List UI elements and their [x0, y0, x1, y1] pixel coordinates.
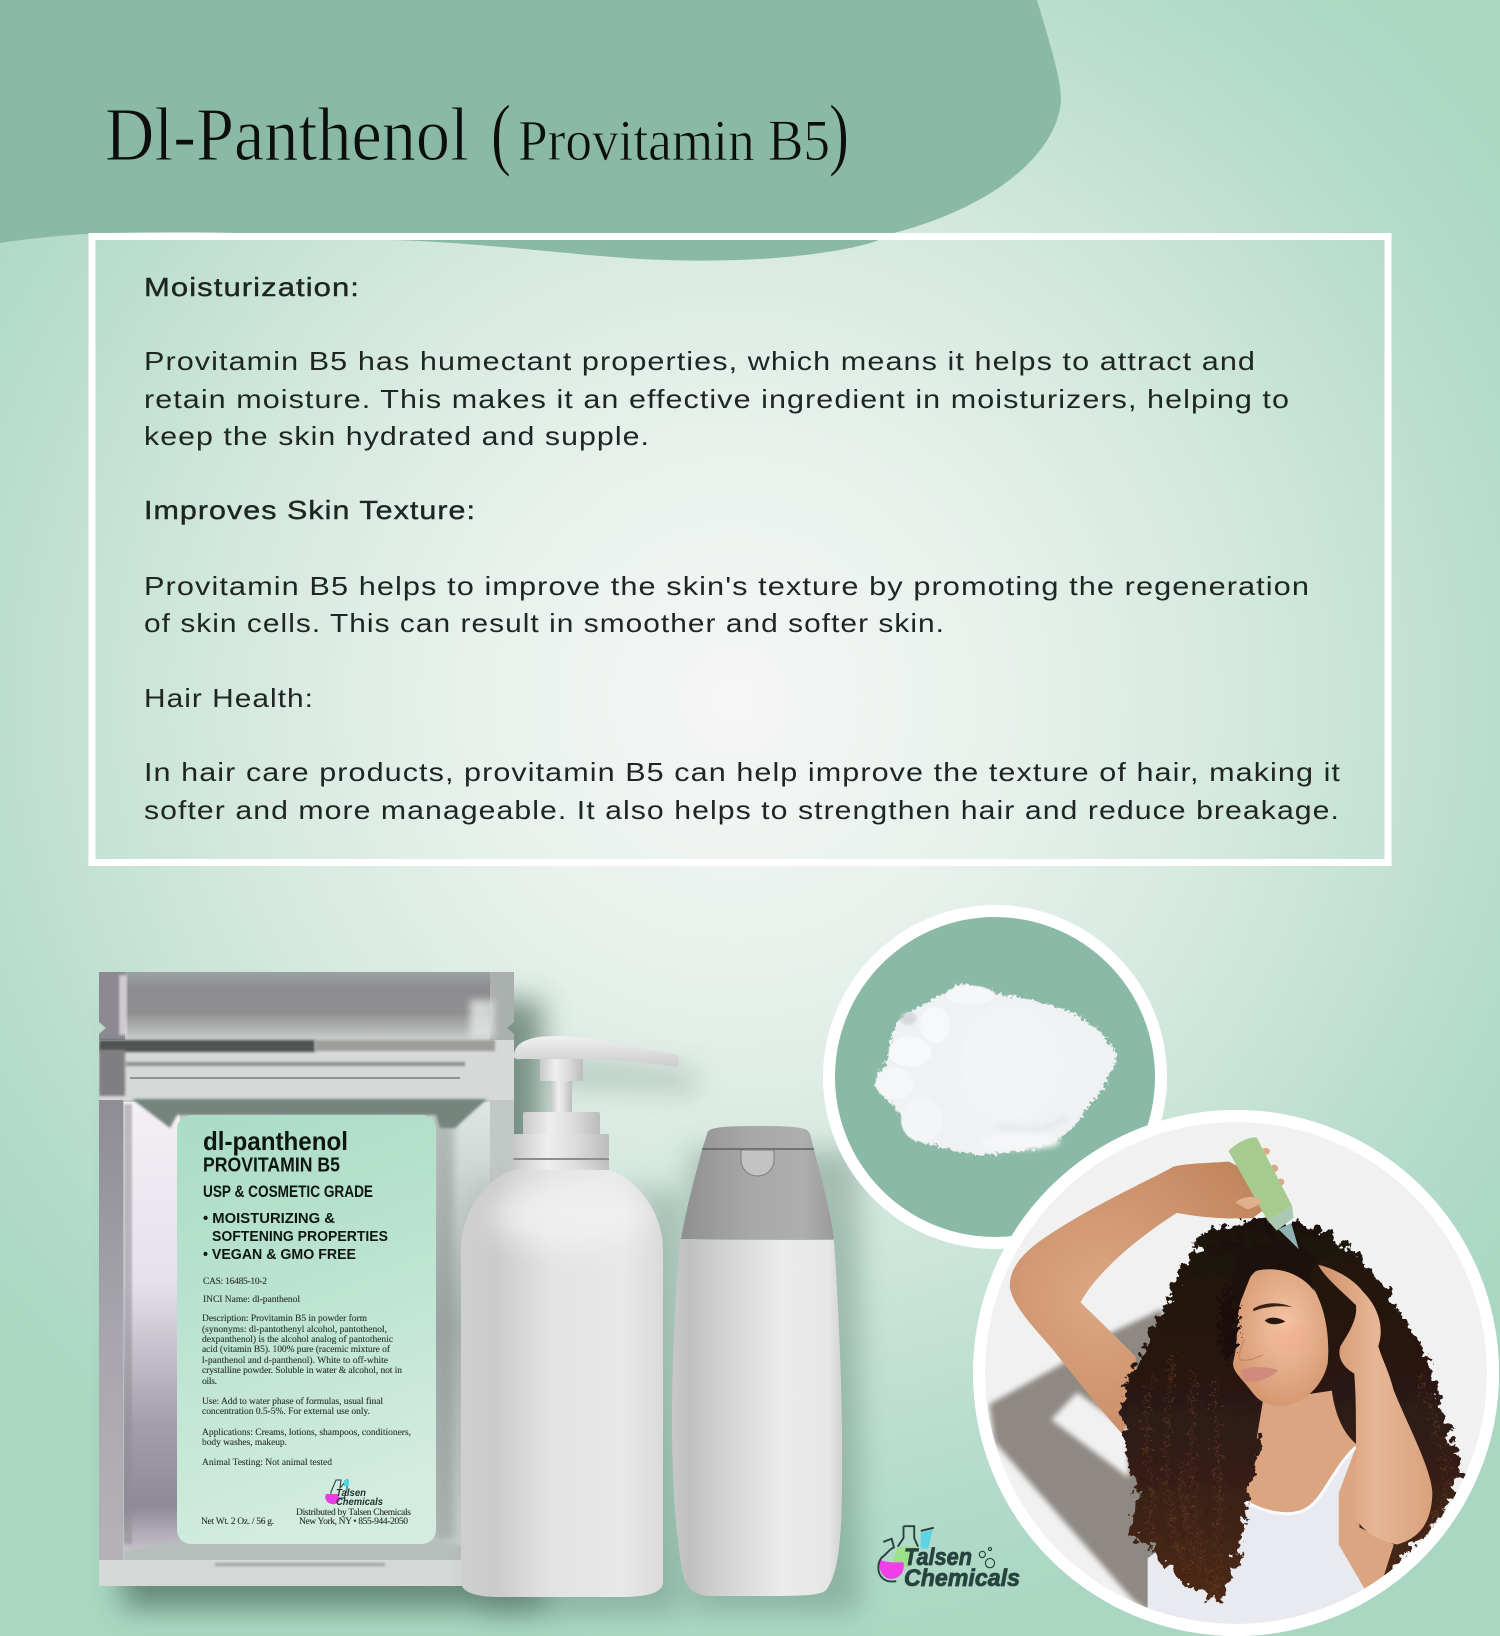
- hair front left: [1125, 1240, 1263, 1599]
- right arm and hand: [1318, 1265, 1432, 1544]
- face: [1233, 1268, 1328, 1406]
- hair over forehead: [1250, 1268, 1314, 1292]
- tank top: [1148, 1447, 1366, 1627]
- product label: Applications: Creams, lotions, shampoos, conditioners,: [202, 1428, 411, 1438]
- pouch shadow: [122, 1000, 542, 1608]
- bottle in hand: [1229, 1137, 1299, 1249]
- text: moisturization body: Provitamin B5 has humectant properties, which means it helps to attract and: [144, 346, 1256, 376]
- inner top shading: [132, 1099, 487, 1128]
- logo: Talsen Chemicals: Talsen: [904, 1544, 972, 1571]
- small logo: Talsen: [336, 1487, 366, 1499]
- product label: • MOISTURIZING &: [203, 1211, 336, 1227]
- small logo: Chemicals: [336, 1496, 383, 1508]
- text: skin texture body: Provitamin B5 helps to improve the skin's texture by promoting the regeneration: [144, 571, 1310, 601]
- text: hair health body: [144, 757, 1341, 825]
- text: moisturization body: retain moisture. This makes it an effective ingredient in moisturizers, helping to: [144, 384, 1290, 414]
- product label: acid (vitamin B5). 100% pure (racemic mixture of: [202, 1344, 391, 1355]
- product label: l-panthenol and d-panthenol). White to off-white: [202, 1355, 388, 1366]
- product label: dl-panthenol: [203, 1126, 348, 1156]
- product label: Animal Testing: Not animal tested: [202, 1458, 332, 1468]
- product label: crystalline powder. Soluble in water & alcohol, not in: [202, 1366, 402, 1376]
- panel: benefits text box: [92, 236, 1388, 862]
- product label: Net Wt. 2 Oz. / 56 g.: [201, 1517, 274, 1527]
- header blob: [0, 0, 1061, 261]
- text: hair health body: softer and more manageable. It also helps to strengthen hair and reduce breakage.: [144, 795, 1340, 825]
- logo: Talsen Chemicals: [878, 1526, 1020, 1592]
- circle: powder: [829, 911, 1161, 1243]
- raised arm: [1010, 1162, 1265, 1433]
- lips: [1241, 1367, 1278, 1382]
- foil pouch: [99, 972, 514, 1586]
- heading: hair health: Hair Health:: [144, 683, 314, 713]
- product label: concentration 0.5-5%. For external use only.: [202, 1407, 370, 1417]
- circle: woman applying hair product: [973, 1110, 1500, 1636]
- title: Provitamin B5: [518, 108, 830, 173]
- title: ): [829, 90, 849, 178]
- bottles shadow: [480, 1060, 860, 1615]
- logo: Talsen Chemicals: Chemicals: [904, 1565, 1020, 1592]
- text: hair health body: In hair care products, provitamin B5 can help improve the texture of hair, making it: [144, 757, 1341, 787]
- pump bottle body: [461, 1170, 663, 1597]
- text: skin texture body: [144, 571, 1310, 638]
- text: skin texture body: of skin cells. This can result in smoother and softer skin.: [144, 608, 945, 638]
- product label: PROVITAMIN B5: [203, 1154, 340, 1176]
- product label: dexpanthenol) is the alcohol analog of pantothenic: [202, 1334, 393, 1345]
- bottle body: [672, 1240, 842, 1596]
- pump head: [514, 1036, 679, 1067]
- product label: INCI Name: dl-panthenol: [203, 1295, 300, 1305]
- product label: SOFTENING PROPERTIES: [212, 1229, 388, 1245]
- product label: Description: Provitamin B5 in powder form: [202, 1313, 368, 1324]
- product label: [177, 1115, 436, 1544]
- text: moisturization body: keep the skin hydrated and supple.: [144, 421, 650, 451]
- curl strands: [1146, 1356, 1449, 1592]
- powder pile: [875, 984, 1117, 1155]
- heading: improves skin texture: Improves Skin Texture:: [144, 495, 476, 525]
- product label: Distributed by Talsen Chemicals: [296, 1508, 411, 1518]
- inner left panel: [124, 1102, 180, 1552]
- bottle cap: [681, 1126, 834, 1239]
- title: [105, 90, 849, 178]
- icon: flasks: [878, 1526, 995, 1581]
- title: Dl-Panthenol: [105, 93, 469, 177]
- product label: Use: Add to water phase of formulas, usual final: [202, 1396, 383, 1407]
- frame strips: [99, 1100, 123, 1566]
- flip-cap bottle: [672, 1126, 842, 1596]
- text: moisturization body: [144, 346, 1290, 451]
- wall shadow: [989, 1309, 1167, 1627]
- zipper: [99, 1040, 514, 1100]
- product label: • VEGAN & GMO FREE: [203, 1247, 356, 1263]
- nose shadow: [1239, 1339, 1263, 1360]
- product label: New York, NY • 855-944-2050: [299, 1517, 408, 1527]
- neck and chest: [1246, 1390, 1394, 1593]
- heading: moisturization: Moisturization:: [144, 272, 360, 302]
- pump bottle: [461, 1036, 679, 1597]
- eye and brow: [1253, 1303, 1292, 1324]
- inner right panel: [430, 1102, 490, 1478]
- hair back: [1122, 1220, 1461, 1603]
- fingers behind bottle: [1262, 1148, 1284, 1185]
- product label: oils.: [202, 1377, 217, 1387]
- small logo: [325, 1480, 383, 1508]
- product label: (synonyms: dl-pantothenyl alcohol, pantothenol,: [202, 1324, 387, 1335]
- top seal band: [99, 972, 514, 1040]
- product label: CAS: 16485-10-2: [203, 1277, 267, 1287]
- product label: body washes, makeup.: [202, 1438, 287, 1448]
- title: (: [491, 90, 511, 178]
- product label: USP & COSMETIC GRADE: [203, 1182, 373, 1201]
- lower band: [124, 1540, 461, 1560]
